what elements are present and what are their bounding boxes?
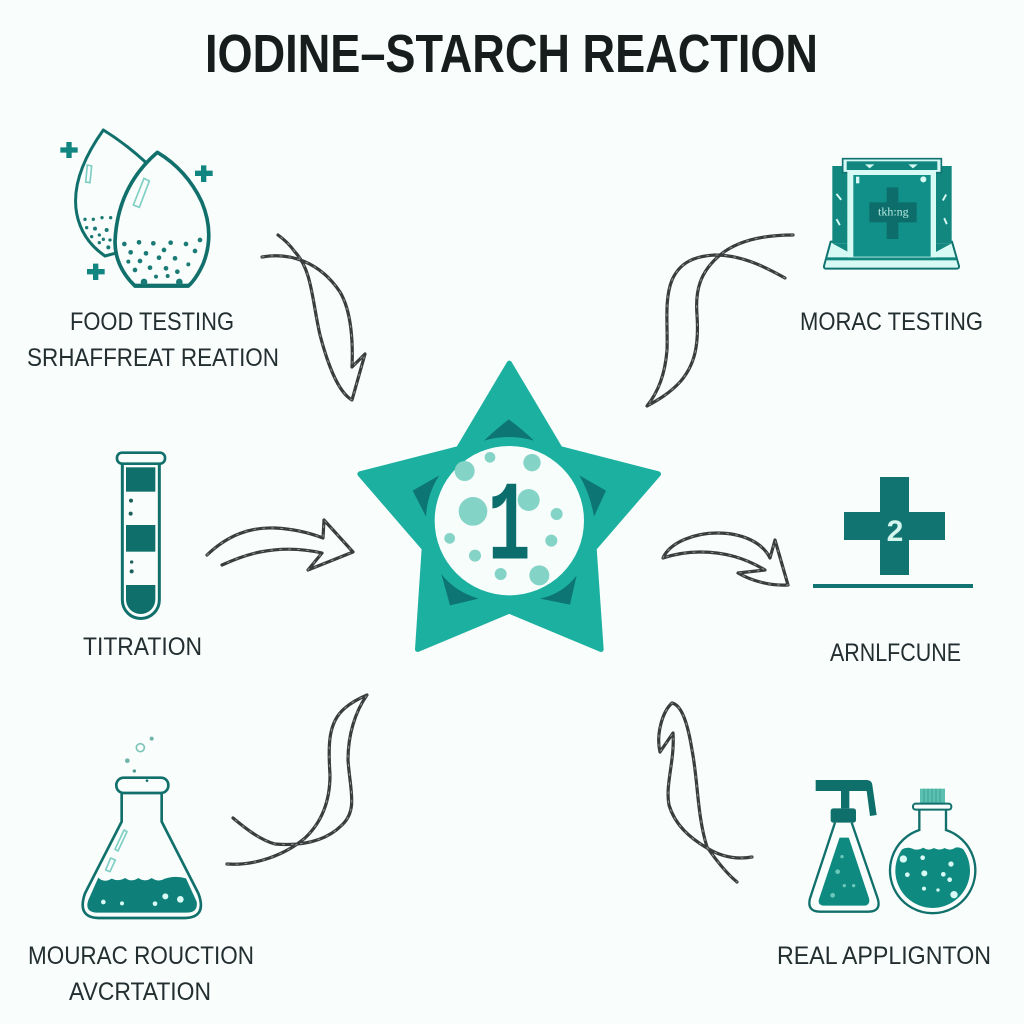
arrow: bottom left [227, 695, 367, 864]
front drop highlight [133, 178, 149, 207]
icon: cross with number 2 [813, 477, 973, 588]
round flask ribbed cap [920, 789, 945, 803]
rising bubbles [125, 737, 154, 782]
arrow: top right [647, 235, 793, 406]
icon: spray bottle and round flask [809, 780, 975, 913]
label: avcrtation: AVCRTATION [69, 978, 211, 1006]
back drop dots [83, 216, 112, 249]
title: IODINE–STARCH REACTION [205, 24, 818, 84]
back drop highlight [86, 165, 92, 183]
cross label: tkh:ng [878, 204, 909, 218]
flask lip [116, 778, 168, 793]
label: mourac rouction: MOURAC ROUCTION [28, 942, 254, 970]
round flask body [890, 810, 975, 913]
plus signs [60, 142, 213, 280]
flask liquid [87, 877, 197, 913]
icon: test kit box [824, 159, 959, 269]
base teal strip [827, 257, 956, 260]
base line [813, 584, 973, 588]
label: titration: TITRATION [83, 633, 202, 661]
icon: central star badge [360, 363, 658, 649]
number 1: 1 [488, 465, 530, 593]
back drop [76, 130, 157, 256]
cross shape [844, 477, 945, 575]
tube body [122, 464, 159, 618]
central starch circle [435, 446, 584, 595]
flask highlights [106, 830, 127, 872]
arrow: middle right [663, 533, 788, 585]
panel cross [869, 187, 917, 239]
top frame teal strip [847, 161, 937, 170]
number 2: 2 [887, 515, 903, 548]
round flask lip [913, 804, 951, 810]
star shape [360, 363, 658, 649]
round flask bubbles [900, 855, 958, 898]
liquid bubbles [101, 893, 184, 906]
tube dots [129, 499, 134, 573]
label: food testing: FOOD TESTING [70, 308, 234, 336]
front drop base [134, 284, 189, 288]
inner panel [853, 175, 931, 257]
tube cap [117, 453, 165, 464]
spray head [816, 780, 877, 816]
flask body [83, 793, 201, 918]
spray bubbles [830, 855, 855, 898]
base plate [824, 242, 959, 269]
icon: conical flask [83, 737, 201, 918]
spray bottle body [809, 823, 879, 912]
round flask liquid [895, 847, 970, 908]
spray liquid [819, 838, 869, 905]
arrow: top left [262, 235, 365, 400]
top frame [843, 159, 941, 173]
small marks [836, 164, 948, 226]
arrow: middle left [207, 520, 353, 570]
starch granule dots [444, 452, 563, 585]
icon: test tube [117, 453, 165, 618]
spray collar [831, 808, 856, 823]
icon: starch drops [60, 130, 213, 288]
front drop [115, 152, 209, 286]
arrow: bottom right [659, 703, 752, 882]
tube liquid bands [126, 467, 155, 614]
label: morac testing: MORAC TESTING [800, 308, 983, 336]
label: arnlfcune: ARNLFCUNE [830, 639, 961, 667]
front drop dots [122, 238, 202, 285]
side wings [832, 166, 952, 243]
label: food testing second line: SRHAFFREAT REATION [27, 344, 279, 372]
label: real application: REAL APPLIGNTON [777, 942, 991, 970]
light inner frame [847, 170, 936, 257]
star inner dark triangles [413, 419, 606, 605]
